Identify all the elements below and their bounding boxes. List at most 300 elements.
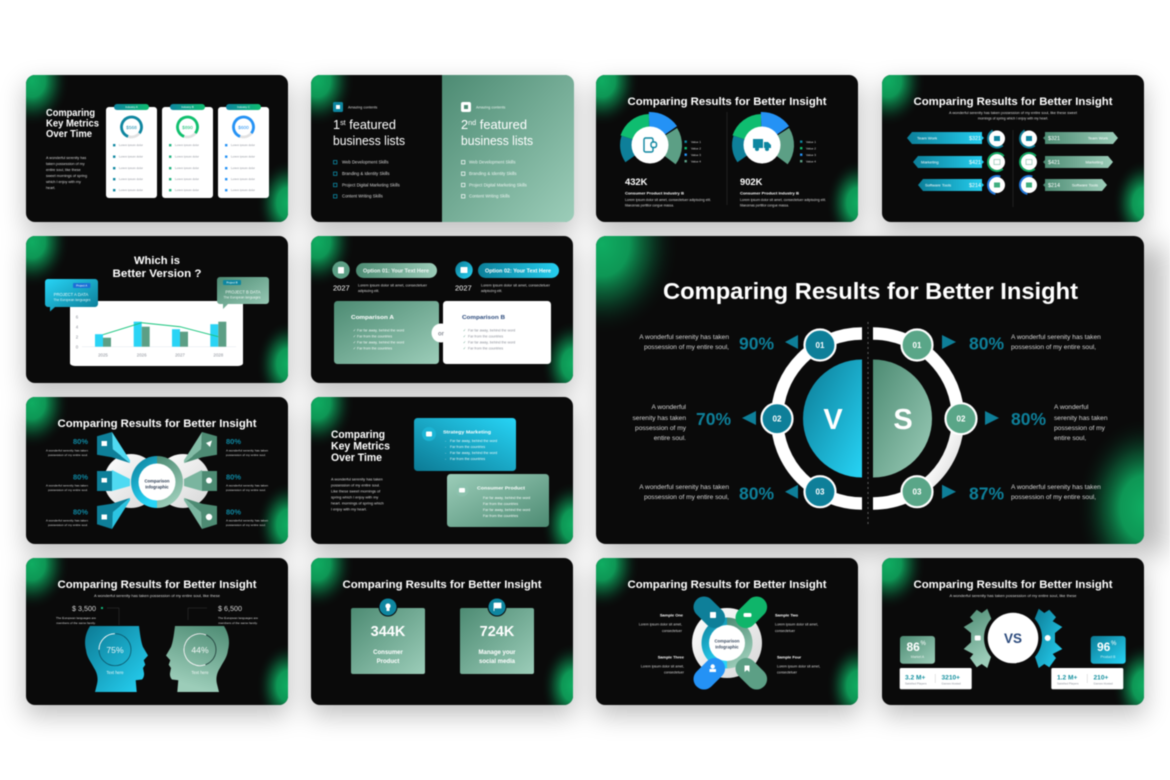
subtitle: A wonderful serenity has taken possession of my entire soul, like these sweet (949, 111, 1077, 115)
right descriptions: entire soul, (1054, 435, 1086, 442)
left descriptions: possession of my entire soul, (644, 494, 729, 501)
first list: Web Development Skills (342, 160, 388, 164)
legend 2: Value 2 (806, 146, 816, 150)
card: Industry B: Lorem ipsum dolor (175, 177, 199, 181)
left head: 75% (106, 645, 124, 655)
percentages: 70% (696, 409, 731, 429)
right head: Text here (191, 670, 209, 675)
card: strategy marketing: Far far away, behind the word (450, 451, 497, 455)
first list: Amazing contents (348, 106, 377, 110)
stat box right: Games Hosted (1094, 682, 1113, 686)
card: comparison B: Far far away, behind the word (468, 328, 515, 332)
card: comparison B: ✓ (463, 328, 466, 332)
left stats: A wonderful serenity has taken (46, 518, 88, 522)
card: comparison A: ✓ (353, 328, 356, 332)
stat block 2: Consumer Product Industry B (740, 191, 799, 195)
left nodes: 01 (816, 341, 825, 350)
card: strategy marketing: Far from the countries (450, 445, 485, 449)
left value with connector: The European languages are (56, 616, 96, 620)
bar chart (70, 301, 243, 366)
card: comparison B: ✓ (463, 334, 466, 338)
card: Industry B: Lorem ipsum dolor (175, 166, 199, 170)
legend 1: Value 4 (691, 159, 701, 163)
right arrow bands: $214 (1048, 183, 1060, 189)
right stats: possession of my entire soul. (226, 488, 266, 492)
label: sample two (775, 612, 818, 633)
heading: Over Time (331, 452, 382, 464)
left nodes: 02 (773, 415, 782, 424)
label: sample two: consectetuer (775, 629, 796, 633)
right descriptions: A wonderful serenity has taken (1011, 484, 1101, 491)
second list: Web Development Skills (469, 160, 516, 164)
legend 1: Value 3 (691, 153, 701, 157)
left stats: possession of my entire soul. (48, 453, 88, 457)
left stats (46, 437, 88, 527)
card: Industry C: Lorem ipsum dolor (231, 166, 255, 170)
left gear (964, 609, 992, 668)
card: consumer product: Consumer Product (477, 486, 525, 491)
center hub: Comparison (714, 638, 740, 644)
center divider (867, 322, 869, 525)
title: Better Version ? (112, 268, 202, 280)
bar chart: 2026 (137, 352, 147, 358)
right stats: possession of my entire soul. (226, 453, 266, 457)
right arrow bands: $321 (1048, 136, 1060, 142)
legend 1 (684, 140, 701, 163)
chart: semi donut 2 (732, 112, 794, 164)
right descriptions: A wonderful (1054, 404, 1089, 411)
left tiles (97, 432, 130, 529)
subtitle: A wonderful serenity has taken possession of my entire soul, like these (950, 594, 1077, 598)
card: comparison B: ✓ (463, 340, 466, 344)
left value with connector: $ 3,500 (72, 606, 96, 613)
card: consumer product: Far from the countries (483, 514, 518, 518)
right value with connector: $ 6,500 (218, 606, 242, 613)
legend 1: Value 2 (691, 146, 701, 150)
card: 724K: Manage your (478, 650, 516, 656)
left arrow bands: $421 (969, 160, 981, 166)
label: sample four: Lorem ipsum dolor sit amet, (777, 664, 820, 668)
stat: product B (1091, 636, 1126, 664)
second list: Branding & Identity Skills (469, 171, 517, 176)
description: heart. mornings of spring which (331, 501, 384, 505)
right stats (226, 437, 268, 527)
card: comparison B: Far from the countries (468, 334, 503, 338)
stat block 2: 902K (740, 176, 763, 187)
description: A wonderful serenity has (46, 156, 86, 160)
panel: which is better version (0, 196, 320, 408)
option 02: Option 02: Your Text Here (485, 268, 551, 274)
percentages (696, 334, 1046, 504)
S half: S (893, 404, 913, 436)
left descriptions: A wonderful serenity has taken (639, 334, 729, 341)
card: Industry C: Industry C (237, 105, 250, 109)
card: consumer product: Far far away, behind the word (483, 496, 530, 500)
card: strategy marketing: Strategy Marketing (443, 430, 491, 434)
left arrow bands: $214 (969, 183, 981, 189)
right arrow bands: Marketing (1085, 160, 1103, 164)
left stats: A wonderful serenity has taken (46, 484, 88, 488)
bar chart: 0 (76, 344, 79, 349)
title: Comparing Results for Better Insight (914, 579, 1113, 591)
card: 724K: social media (479, 659, 516, 665)
label: sample one (639, 612, 684, 633)
legend 2: Value 1 (806, 140, 816, 144)
left icon circles (984, 126, 1010, 195)
option 02: 2027 (455, 284, 472, 292)
card: consumer product: Far from the countries (483, 502, 518, 506)
card: comparison B: Comparison B (462, 315, 505, 321)
card: Industry C (218, 104, 269, 198)
callout: project A: Project A (76, 284, 87, 288)
left stats: possession of my entire soul. (48, 523, 88, 527)
card: Industry A: Lorem ipsum dolor (119, 154, 143, 158)
second list: business lists (461, 134, 533, 148)
card: Industry B (162, 104, 213, 198)
card: strategy marketing: Far far away, behind the word (450, 439, 497, 443)
divider (726, 112, 728, 205)
left descriptions: serenity has taken (632, 415, 686, 422)
first list: featured (346, 118, 396, 132)
right descriptions: A wonderful serenity has taken (1011, 334, 1101, 341)
left value with connector: members of the same family. (56, 621, 96, 625)
left value with connector (56, 606, 119, 625)
callout: project A (45, 279, 98, 312)
panel: option comparison (279, 196, 605, 408)
callout: project B: The European languages (223, 296, 261, 300)
capsule: top right (731, 592, 771, 632)
card: consumer product: Far far away, behind the word (483, 508, 530, 512)
stat block 2: Lorem ipsum dolor sit amet, consectetuer adipiscing elit. (740, 198, 826, 202)
stat block 1 (625, 176, 711, 208)
card: Industry A: $568 (126, 125, 137, 131)
bar chart: 2027 (175, 352, 185, 358)
title: Comparing Results for Better Insight (914, 96, 1113, 108)
heading: Comparing (46, 108, 95, 119)
card: Industry B: Industry B (181, 105, 194, 109)
right stats: A wonderful serenity has taken (226, 484, 268, 488)
description: taken possession of my (46, 162, 85, 166)
card: Industry A: Lorem ipsum dolor (119, 188, 143, 192)
card: comparison A: Far far away, behind the word (357, 340, 404, 344)
percentages: 90% (739, 334, 774, 354)
label: sample three: Sample Three (658, 654, 685, 660)
percentages: 80% (969, 334, 1004, 354)
description: sweet mornings of spring (46, 174, 87, 178)
stat block 2 (740, 176, 826, 208)
right descriptions: possession of my (1054, 425, 1106, 432)
card: 724K: 724K (480, 624, 515, 640)
bar chart: 6 (76, 314, 79, 319)
center ring: Infographic (145, 484, 169, 490)
stat box right: 1.2 M+ (1057, 675, 1077, 682)
panel: sample capsules infographic (564, 518, 890, 730)
description: which I enjoy with my (46, 180, 81, 184)
stat box left: Games Hosted (942, 682, 961, 686)
card: Industry B: Lorem ipsum dolor (175, 143, 199, 147)
option 02: adipiscing elit. (481, 289, 502, 293)
second list: 2 (461, 118, 468, 132)
chart: semi donut 1 (620, 112, 682, 164)
description: heart. (46, 186, 55, 190)
stat block 1: Consumer Product Industry B (625, 191, 684, 195)
card: comparison B: ✓ (463, 346, 466, 350)
callout: project B: PROJECT B DATA (225, 290, 261, 294)
label: sample four: consectetuer (777, 670, 798, 674)
card: Industry B: Lorem ipsum dolor (175, 188, 199, 192)
option 01: Lorem ipsum dolor sit amet, consectetuer (358, 284, 428, 288)
card: Industry C: Lorem ipsum dolor (231, 154, 255, 158)
card: strategy marketing: - (445, 439, 447, 443)
panel: large VS slide (595, 235, 1145, 545)
second list: Amazing contents (476, 106, 505, 110)
card: comparison A: Comparison A (351, 315, 394, 321)
right half background (442, 75, 574, 222)
label: sample two: Sample Two (775, 612, 799, 618)
label: sample four (777, 654, 820, 674)
card: Industry C: Lorem ipsum dolor (231, 143, 255, 147)
capsule: top left (689, 592, 729, 632)
title: Comparing Results for Better Insight (663, 278, 1078, 304)
bar chart: 2 (76, 334, 79, 339)
stat: market A: Market A (911, 655, 925, 659)
heading: Key Metrics (46, 118, 99, 130)
heading: Key Metrics (331, 440, 390, 452)
stat block 2: Maecenas porttitor congue massa. (740, 204, 789, 208)
stat block 1: Lorem ipsum dolor sit amet, consectetuer adipiscing elit. (625, 198, 711, 202)
bar chart: 4 (76, 324, 79, 329)
or badge (432, 324, 450, 342)
card: strategy marketing: Far from the countries (450, 457, 485, 461)
card: 724K (460, 598, 534, 674)
second list: featured (476, 118, 527, 132)
first list: 1 (333, 118, 340, 132)
first list: st (340, 120, 346, 127)
right stats: possession of my entire soul. (226, 523, 266, 527)
right icon circles (1016, 126, 1042, 195)
card: Industry A: Industry A (125, 105, 138, 109)
second list: Project Digital Marketing Skills (469, 182, 527, 187)
callout: project B: Project B (226, 281, 238, 285)
label: sample two: Lorem ipsum dolor sit amet, (775, 622, 818, 626)
option 01 (332, 261, 437, 293)
description: Like these sweet mornings of (331, 489, 381, 493)
stat box left: 3.2 M+ (905, 675, 925, 682)
label: sample four: Sample Four (777, 654, 802, 660)
card: comparison B (443, 301, 551, 364)
stat: market A (900, 636, 935, 664)
card: comparison A: ✓ (353, 334, 356, 338)
legend 2: Value 4 (806, 159, 816, 163)
title: Comparing Results for Better Insight (58, 418, 257, 430)
first list: Project Digital Marketing Skills (342, 182, 400, 187)
center ring (131, 456, 183, 508)
icon: truck (753, 139, 771, 151)
description (331, 477, 384, 511)
stat: market A: % (920, 641, 926, 647)
right arrow bands (1043, 132, 1118, 191)
panel: strategy and consumer cards (279, 357, 605, 569)
title: Comparing Results for Better Insight (628, 579, 827, 591)
capsule: bottom left (689, 654, 729, 694)
heading (46, 108, 99, 140)
label: sample three: Lorem ipsum dolor sit amet, (641, 664, 684, 668)
title: Comparing Results for Better Insight (58, 579, 257, 591)
right value with connector (188, 606, 258, 625)
first list: Branding & Identity Skills (342, 171, 390, 176)
percentages: 87% (969, 484, 1004, 504)
card: Industry A: Lorem ipsum dolor (119, 143, 143, 147)
left descriptions (632, 334, 729, 501)
right stats: A wonderful serenity has taken (226, 518, 268, 522)
title (112, 255, 202, 280)
first list: Content Writing Skills (342, 194, 383, 199)
stat: product B: % (1111, 641, 1117, 647)
panel: 344K and 724K cards (279, 518, 605, 730)
white blobs (104, 454, 210, 508)
second list (461, 102, 533, 199)
slide background (595, 235, 1145, 545)
right value with connector: The European languages are (218, 616, 258, 620)
option 02: Lorem ipsum dolor sit amet, consectetuer (481, 284, 551, 288)
left descriptions: possession of my entire soul, (644, 344, 729, 351)
left arrow bands: Marketing (921, 160, 939, 164)
capsule: bottom right (731, 654, 771, 694)
left stats: 80% (73, 508, 88, 516)
card: Industry A: Lorem ipsum dolor (119, 166, 143, 170)
right value with connector: members of the same family. (218, 621, 258, 625)
option 01: adipiscing elit. (358, 289, 379, 293)
V half (777, 334, 862, 504)
callout: project A: The European languages (53, 298, 91, 302)
panel: head silhouettes (0, 518, 320, 730)
heading (331, 429, 390, 464)
left descriptions: possession of my (635, 425, 687, 432)
subtitle: A wonderful serenity has taken possession of my entire soul, like these (94, 594, 220, 598)
center hub (692, 608, 762, 678)
description: possession of my entire soul. (331, 483, 380, 487)
left stats: 80% (73, 437, 88, 446)
panel: donut comparison (564, 35, 890, 247)
card: Industry A (106, 104, 157, 198)
second list: Content Writing Skills (469, 194, 510, 199)
label: sample three: consectetuer (664, 670, 685, 674)
percentages: 80% (739, 484, 774, 504)
card: Industry C: Lorem ipsum dolor (231, 188, 255, 192)
subtitle: mornings of spring which I enjoy with my heart. (978, 116, 1048, 120)
stat box right: 210+ (1094, 675, 1109, 682)
legend 2: Value 3 (806, 153, 816, 157)
panel: 3D tile infographic (0, 357, 320, 569)
slide shadows (26, 85, 1165, 715)
right head (166, 626, 229, 692)
left descriptions: entire soul. (654, 435, 686, 442)
right nodes: 02 (957, 415, 966, 424)
callout: project B (217, 277, 269, 309)
divider (1012, 130, 1014, 207)
center hub: Infographic (715, 644, 739, 650)
description: I enjoy with my heart. (331, 507, 367, 511)
card: 344K: Product (377, 659, 399, 665)
card: Industry B: $890 (182, 125, 193, 131)
right descriptions: possession of my entire soul, (1011, 494, 1096, 501)
card: strategy marketing (414, 418, 516, 471)
card: comparison A: Far far away, behind the word (357, 328, 404, 332)
left nodes (762, 330, 836, 507)
left head (85, 626, 148, 692)
stat block 1: 432K (625, 176, 648, 187)
right arrow bands: Software Tools (1072, 182, 1098, 188)
right descriptions: possession of my entire soul, (1011, 344, 1096, 351)
description: entire soul, like these (46, 168, 81, 172)
bar chart: 2028 (213, 352, 224, 358)
card: comparison A: Far from the countries (357, 334, 392, 338)
heading: Comparing (331, 429, 385, 441)
callout: project A: PROJECT A DATA (54, 292, 89, 297)
card: strategy marketing: - (445, 451, 447, 455)
stat box left: 3210+ (942, 675, 960, 682)
right arrow bands: Team Work (1088, 136, 1108, 140)
right gear (1034, 609, 1062, 668)
left arrow bands (907, 132, 984, 191)
card: Industry C: $600 (238, 125, 249, 131)
bar chart: 2025 (98, 352, 108, 358)
stat box right: Satisfied Players (1057, 682, 1079, 686)
gear icons (975, 635, 1051, 641)
right head: 44% (191, 645, 209, 655)
left descriptions: A wonderful (652, 404, 687, 411)
VS badge: VS (1004, 631, 1022, 646)
left descriptions: A wonderful serenity has taken (639, 484, 729, 491)
left stats: possession of my entire soul. (48, 488, 88, 492)
right descriptions: serenity has taken (1054, 415, 1108, 422)
stat: product B: 96 (1097, 640, 1111, 654)
right nodes: 01 (913, 341, 922, 350)
description: A wonderful serenity has taken (331, 477, 383, 481)
right stats: A wonderful serenity has taken (226, 448, 268, 452)
left arrow bands: $321 (969, 136, 981, 142)
description: spring which I enjoy with my (331, 495, 378, 499)
panel: arrow band comparison (850, 35, 1170, 247)
card: 344K: Consumer (373, 650, 404, 656)
arrows (742, 335, 999, 499)
title: Comparing Results for Better Insight (628, 96, 827, 108)
center ring: Comparison (144, 478, 170, 484)
card: Industry A: Lorem ipsum dolor (119, 177, 143, 181)
card: Industry C: Lorem ipsum dolor (231, 177, 255, 181)
legend 2 (800, 140, 816, 163)
left stats: 80% (73, 472, 88, 481)
card: strategy marketing: - (445, 457, 447, 461)
right stats: 80% (226, 508, 241, 516)
left nodes: 03 (816, 488, 825, 497)
stat: market A: 86 (906, 640, 920, 654)
label: sample one: consectetuer (662, 629, 683, 633)
option 01: Option 01: Your Text Here (363, 268, 429, 274)
option 02 (455, 261, 559, 293)
card: comparison B: Far far away, behind the word (468, 340, 515, 344)
label: sample one: Sample One (660, 612, 684, 618)
label: sample three (641, 654, 685, 674)
title: Comparing Results for Better Insight (342, 579, 542, 591)
stat: product B: Product B (1101, 655, 1116, 659)
stat box left: Satisfied Players (905, 682, 927, 686)
option 01: 2027 (333, 284, 350, 292)
first list: business lists (333, 134, 405, 148)
V half: V (823, 404, 843, 436)
card: consumer product (447, 474, 549, 527)
label: sample one: Lorem ipsum dolor sit amet, (639, 622, 682, 626)
